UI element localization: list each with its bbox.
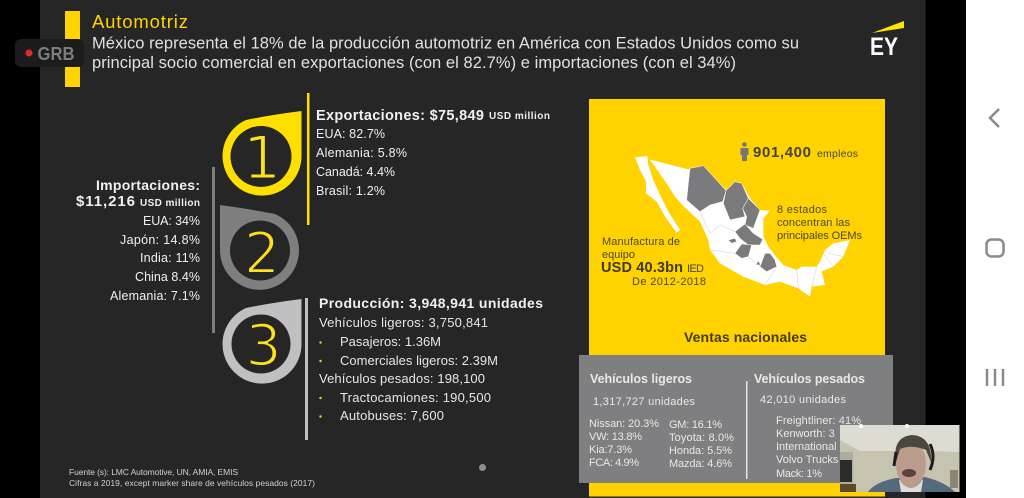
heading: national sales: Ventas nacionales [684,329,807,345]
divider: production [305,298,308,440]
text block: imports: USD million [140,198,200,209]
icon: step 3 drop: 3 [245,313,282,379]
text block: exports: Canadá: 4.4% [316,165,395,179]
light vehicles [589,372,734,470]
callout: 8 states: 8 estados [777,204,828,216]
callout: equipment manufacturing: De 2012-2018 [632,276,706,288]
Baja California [635,156,680,233]
divider: sales columns [746,381,748,479]
icon: step 1 drop: 1 [243,124,281,194]
heavy vehicles: International [776,441,837,453]
callout: equipment manufacturing: equipo [602,249,635,261]
icon: step 2 drop: 2 [244,221,280,287]
text block: production: Producción: 3,948,941 unidades [319,295,543,311]
heavy vehicles: Freightliner: 41% [776,415,861,427]
text block: imports: Alemania: 7.1% [110,289,200,303]
callout: equipment manufacturing: Manufactura de [602,236,680,248]
light vehicles: VW: 13.8% [589,431,642,443]
text block: exports: Brasil: 1.2% [316,184,385,198]
callout: 8 states [777,204,862,242]
text block: exports: Exportaciones: $75,849 [316,108,484,124]
light vehicles: Toyota: 8.0% [669,432,734,444]
heavy vehicles [754,372,865,480]
recording badge: GRB [15,39,84,67]
footnote: Cifras a 2019, except marker share de vehículos pesados (2017) [69,478,315,488]
subtitle: principal socio comercial en exportaciones (con el 82.7%) e importaciones (con el 34%) [92,54,736,72]
subtitle [92,34,799,72]
light vehicles: Kia:7.3% [589,444,632,456]
footnote: Fuente (s): LMC Automotive, UN, AMIA, EMIS [69,467,238,477]
slide pager dot [479,464,486,471]
callout: equipment manufacturing: IED [687,263,704,275]
text block: production [319,295,543,423]
map of Mexico [635,156,850,297]
light vehicles: Nissan: 20.3% [589,418,659,430]
android navigation bar [966,0,1024,498]
light vehicles: Honda: 5.5% [669,445,732,457]
footnote [69,467,315,488]
icon: step 1 drop [223,111,302,196]
highlighted OEM states [687,166,777,272]
text block: exports: Alemania: 5.8% [316,146,407,160]
text block: exports: USD million [489,111,550,122]
mainland [649,159,850,297]
panel: gray sales panel [579,355,893,483]
icon: step 3 drop [223,299,302,384]
text block: imports: EUA: 34% [143,214,200,228]
stat: employees: empleos [817,148,858,160]
icon: person [740,142,748,161]
light vehicles: GM: 16.1% [669,419,722,431]
callout: equipment manufacturing: USD 40.3bn [601,260,683,276]
heavy vehicles: Volvo Trucks [776,454,839,466]
text block: production: Comerciales ligeros: 2.39M [340,353,498,368]
text block: production: Vehículos pesados: 198,100 [319,371,485,386]
text block: imports: $11,216 [76,193,135,210]
text block: production: Autobuses: 7,600 [340,408,444,423]
text block: production: Vehículos ligeros: 3,750,841 [319,315,488,330]
callout: equipment manufacturing [601,236,706,288]
accent bar [65,11,80,87]
recording badge: GRB: GRB [38,44,74,64]
stat: employees [753,144,858,161]
text block: production: Tractocamiones: 190,500 [340,390,491,405]
EY logo [870,21,904,61]
heavy vehicles: Vehículos pesados [754,372,865,386]
subtitle: México representa el 18% de la producción automotriz en América con Estados Unidos como su [92,34,799,52]
EY logo: EY [870,33,898,61]
text block: imports: Japón: 14.8% [120,233,200,247]
stat: employees: 901,400 [753,144,811,161]
heavy vehicles: Kenworth: 3 [776,428,835,440]
text block: imports: China 8.4% [135,270,200,284]
light vehicles: 1,317,727 unidades [593,396,696,408]
title: Automotriz [92,11,188,32]
text block: exports [316,108,550,198]
light vehicles: FCA: 4.9% [589,457,639,469]
heavy vehicles: 42,010 unidades [760,394,846,406]
text block: exports: EUA: 82.7% [316,127,385,141]
webcam inset [840,424,960,492]
heavy vehicles: Mack: 1% [776,468,822,480]
callout: 8 states: principales OEMs [777,230,862,242]
text block: imports [76,177,200,303]
text block: imports: India: 11% [140,251,200,265]
icon: step 2 drop [220,205,299,290]
light vehicles: Mazda: 4.6% [669,458,732,470]
divider: imports [212,167,215,333]
text block: production: Pasajeros: 1.36M [340,334,441,349]
callout: 8 states: concentran las [777,217,850,229]
text block: imports: Importaciones: [96,177,200,193]
light vehicles: Vehículos ligeros [590,372,692,386]
divider: exports [307,93,310,225]
panel: yellow map panel [589,99,885,496]
